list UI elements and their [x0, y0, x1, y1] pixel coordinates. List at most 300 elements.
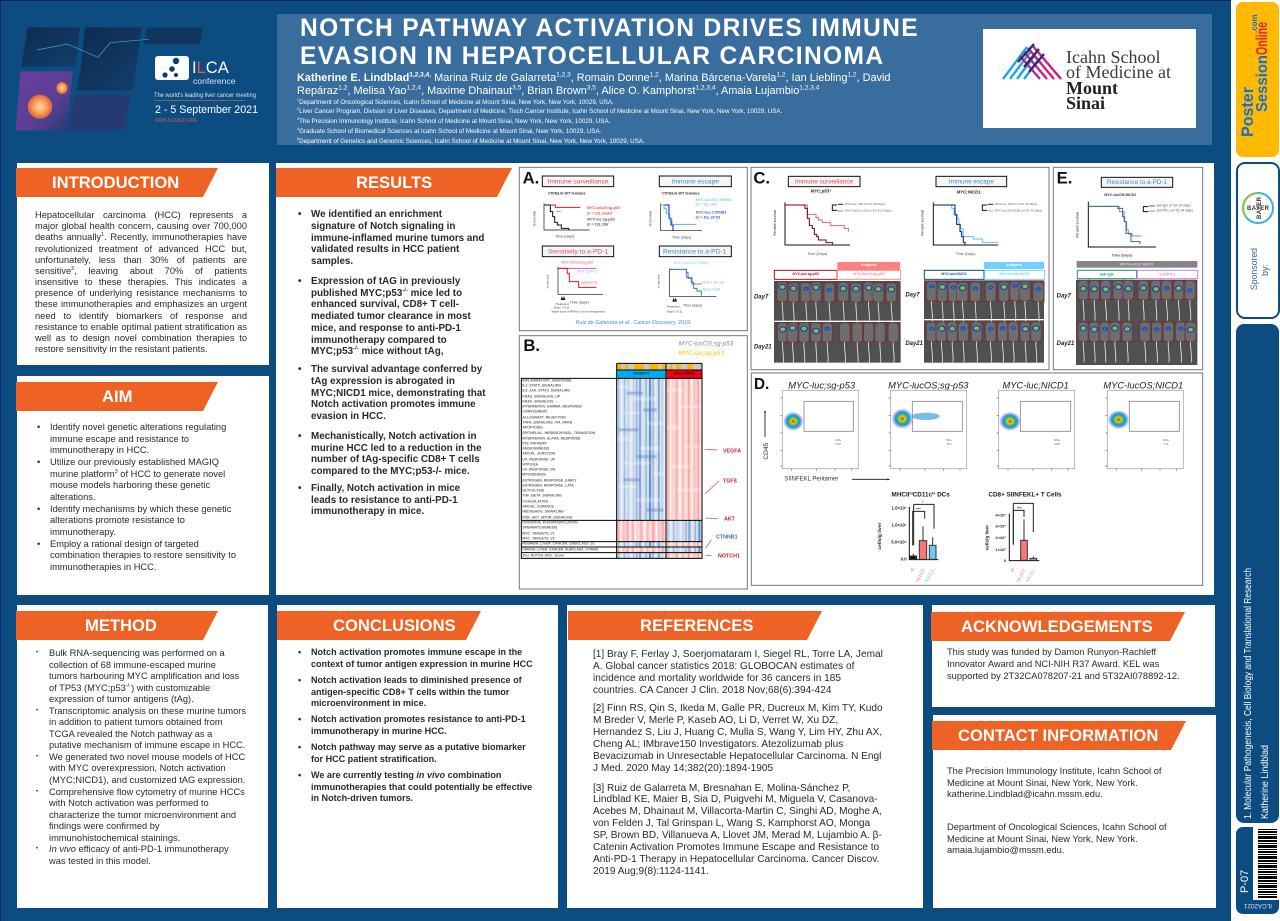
authors: Katherine E. Lindblad1,2,3,4, Marina Ruiz de Galarreta1,2,3, Romain Donne1,2, Marina Bárcena-Varela1,2, Ian Liebling1,2, David [297, 71, 891, 84]
flow plots: SIIN+ [835, 440, 842, 442]
panel C: survival and bioluminescence: Immune escape [949, 178, 994, 185]
panel C: survival and bioluminescence: MYC-luc; p53 (n=14; 48 days) [845, 202, 885, 206]
pathway labels: COMPLEMENT [522, 410, 548, 414]
antigen headers: MYC-lucOS;sg-p53 [853, 272, 885, 276]
list: aims: immunotherapy. [50, 527, 116, 537]
list: aims: immunotherapies in HCC. [50, 562, 156, 572]
panel E: resistance to anti-PD-1: Percent survival [1075, 212, 1079, 238]
heading: conclusions [277, 611, 481, 640]
affiliations: 5Department of Genetics and Genomic Sciences, Icahn School of Medicine at Mount Sinai, New York, New York, 10029, USA. [297, 137, 645, 145]
antigen headers: MYC-luc;NICD1 [941, 272, 967, 276]
list: results findings: Notch activation promotes immune [311, 399, 476, 410]
bar chart: DCs: 1.5×10⁷ [892, 506, 907, 511]
panel letter B: B. [523, 336, 540, 355]
day labels: Day21 [905, 341, 923, 347]
conference logo: ILCA 2021 [16, 27, 258, 131]
day labels [754, 293, 923, 351]
panel A: survival curves: Time (days) [570, 301, 589, 305]
panel: aim [17, 376, 269, 595]
curve: sensitivity [558, 267, 603, 294]
list: results findings: murine HCC led to a reduction in the [311, 442, 482, 454]
cluster headers: INFLAMED [674, 371, 695, 376]
bar chart: T cells: 0 [1004, 558, 1007, 563]
panel letter D: D. [754, 376, 769, 393]
legend: MYC-luc;sg-p53 [679, 350, 725, 357]
panel A: survival curves: (n = 11), 28d [696, 203, 717, 207]
list: conclusions points: microenvironment in mice. [311, 698, 426, 708]
bar chart: T cells: -/- [1009, 566, 1016, 573]
pathway labels: EPITHELIAL_MESENCHYMAL_TRANSITION [522, 431, 596, 435]
pathway labels: PI3K_AKT_MTOR_SIGNALING [522, 516, 573, 520]
tab: poster number and barcode: ILCA2021 [1244, 902, 1272, 909]
list: results findings: Expression of tAG in previously [311, 276, 460, 287]
list: results findings: validated results in HCC patient [311, 244, 459, 255]
legend: MYC-lucOS;sg-p53 [679, 341, 734, 348]
pathway labels: MYC_TARGETS_V1 [522, 531, 555, 535]
panel A: survival curves: MYC-lucOS;sg-p53 [587, 206, 620, 210]
authors: Repáraz1,2, Melisa Yao1,2,4, Maxime Dhainaut3,5, Brian Brown3,5, Alice O. Kamphorst1,2,3,4, Amaia Lujambio1,2,3,4 [297, 84, 819, 97]
list: method steps: in addition to patient tumors obtained from [49, 717, 223, 727]
list: method steps: putative mechanism of immune escape in HCC. [49, 740, 245, 750]
list: method steps: Comprehensive flow cytometry of murine HCCs [49, 787, 245, 797]
panel A: survival curves: C57BL/6 WT females [548, 191, 586, 195]
panel E: resistance to anti-PD-1: MYC-lucOS;NICD1 [1104, 193, 1136, 197]
bar chart: DCs: 5.0×10⁶ [891, 540, 907, 545]
ILCA logo mark and wording: The world's leading liver cancer meeting [154, 92, 257, 99]
heatmap cells [521, 363, 702, 558]
poster title: NOTCH PATHWAY ACTIVATION DRIVES IMMUNE [300, 15, 919, 42]
panel: contact information [933, 715, 1216, 908]
panel C: survival and bioluminescence: MYC-luc; NICD (n=15; 42 days) [995, 202, 1037, 206]
bar chart: T cells: sg-p53 [1015, 568, 1026, 583]
panel C: survival and bioluminescence: MYC;p53 [811, 189, 829, 194]
antigen headers: Antigens [1006, 263, 1022, 267]
day labels: Day7 [905, 293, 920, 299]
bar chart: DCs: NICD1 [924, 568, 935, 583]
list: results findings: MYC;NICD1 mice, demonstrating that [311, 388, 485, 398]
panel C: survival and bioluminescence: Immune surveillance [795, 178, 853, 185]
affiliations: 1Department of Oncological Sciences, Icahn School of Medicine at Mount Sinai, New York, New York, 10029, USA. [297, 97, 614, 106]
bar chart: DCs: hi [909, 491, 913, 495]
panel: references [567, 605, 923, 908]
pathway labels: TNFA_SIGNALING_VIA_NFKB [522, 421, 573, 425]
text: reference list: SP, Brown BD, Villanueva A, Llovet JM, Merad M, Lujambio A. β- [593, 830, 882, 841]
panel C: survival and bioluminescence: MYC;NICD1 [957, 189, 981, 194]
pathway labels [522, 378, 599, 557]
list: results findings: signature of Notch signaling in [311, 221, 455, 232]
list: conclusions points: Notch activation leads to diminished presence of [311, 675, 522, 685]
panel: conclusions [277, 605, 558, 908]
list: aims: Identify mechanisms by which these genetic [50, 504, 231, 514]
pathway labels: SPERMATOGENESIS [522, 526, 558, 530]
curve: escape [661, 203, 702, 231]
tab: sponsor Bayer [1237, 163, 1279, 318]
day labels: Day21 [754, 345, 772, 351]
list: method steps [36, 648, 246, 866]
curve: surveillance [544, 203, 590, 230]
ILCA logo mark and wording: ILCA [192, 59, 229, 77]
bar chart: DCs: 0.0 [901, 557, 907, 562]
pathway labels: INTERFERON_GAMMA_RESPONSE [522, 405, 582, 409]
panel A: survival curves: % survival [546, 274, 550, 288]
panel C: survival and bioluminescence: MYC-lucOS;NICD1 (n=15; 42 days) [995, 209, 1042, 213]
list: aims: alterations promote resistance to [50, 515, 185, 525]
heading: results: RESULTS [356, 173, 432, 192]
text: reference list: Hernandez S, Liu J, Huang C, Mulla S, Wang Y, Lim HY, Zhu AX, [593, 727, 882, 738]
pathway labels: TGF_BETA_SIGNALING [522, 494, 562, 498]
flow titles: MYC-luc;sg-p53 [788, 381, 856, 391]
list: method steps: with MYC overexpression, Notch activation [49, 763, 226, 773]
affiliations [297, 97, 782, 145]
list: conclusions points: antigen-specific CD8+ T cells within the tumor [311, 686, 509, 696]
panel C: survival and bioluminescence: Percent survival [773, 210, 777, 236]
list: aims: immunotherapy in HCC. [50, 445, 149, 455]
text: reference list: Catenin Activation Promotes Immune Escape and Resistance to [593, 842, 879, 853]
flow plots: 3.16 [1164, 444, 1169, 446]
list: results findings: number of tAg-specific CD8+ T cells [311, 454, 480, 465]
tab: topic and presenter [1236, 324, 1279, 823]
ILCA logo mark and wording: WWW.ILCA2021.ORG [155, 118, 197, 124]
pathway labels: UV_RESPONSE_UP [522, 457, 556, 461]
tab: poster session online: Poster [1238, 87, 1257, 137]
panel A: survival curves: % survival [532, 211, 536, 226]
text: reference list: Acebes M, Dhainaut M, Villacorta-Martin C, Singhi AD, Moghe A, [593, 806, 882, 817]
heading: contact information: CONTACT INFORMATION [958, 726, 1158, 745]
icon: Bayer cross logo: BAYER [1247, 206, 1270, 212]
pathway labels: KRAS_SIGNALING [522, 400, 554, 404]
text: reference list [593, 649, 883, 877]
flow plots: 26.3 [947, 444, 952, 446]
list: aims: combination therapies to restore sensitivity to [50, 550, 236, 560]
bar chart: DCs: *** [916, 507, 921, 512]
heading: references [568, 611, 822, 640]
heading: results [276, 168, 512, 197]
list: results findings: Finally, Notch activation in mice [311, 483, 460, 494]
affiliations: 4Graduate School of Biomedical Sciences at Icahn School of Medicine at Mount Sinai, New York, 10029, USA. [297, 127, 601, 135]
text: funding [947, 647, 1180, 681]
citation: Ruiz de Galarreta et al., Cancer Discovery, 2019. [576, 320, 691, 326]
mouse images left [774, 281, 901, 363]
list: aims: Utilize our previously established MAGIQ [50, 457, 219, 467]
panel A: survival curves: % survival [648, 211, 652, 226]
text: reference list: 2019 Aug;9(8):1124-1141. [593, 866, 709, 877]
institution logo: Icahn School of Medicine at Mount Sinai: Sinai [1066, 93, 1105, 113]
list: conclusions points: immunotherapies that could potentially be effective [311, 782, 532, 792]
antigen headers: Antigens [861, 263, 876, 267]
text: reference list: Bevacizumab in Unresectable Hepatocellular Carcinoma. N Engl [593, 751, 881, 762]
tab: topic and presenter: Katherine Lindblad [1260, 745, 1271, 819]
panel B: heatmap [519, 336, 747, 589]
list: conclusions points: in Notch-driven tumors. [311, 793, 413, 803]
pathway labels: P53_PATHWAY [522, 442, 548, 446]
list: results findings: samples. [311, 256, 353, 267]
treatment group headers: MYCluc/OS; NICD1 [1120, 263, 1153, 267]
list: results findings: The survival advantage conferred by [311, 364, 482, 375]
authors [297, 71, 891, 97]
text: reference list: [3] Ruiz de Galarreta M, Bresnahan E, Molina-Sánchez P, [593, 783, 850, 794]
pathway labels: INTERFERON_ALPHA_RESPONSE [522, 437, 581, 441]
list: results findings: mediated tumor clearance in most [311, 311, 471, 322]
heading: references: REFERENCES [640, 616, 753, 635]
text: reference list: Anti-PD-1 Therapy in Hepatocellular Carcinoma. Cancer Discov. [593, 854, 879, 865]
pathway labels: KRAS_SIGNALING_UP [522, 395, 561, 399]
pathway labels: ESTROGEN_RESPONSE_EARLY [522, 479, 577, 483]
panel letter C: C. [753, 168, 770, 187]
flow titles: MYC-lucOS;sg-p53 [888, 381, 969, 391]
list: results findings: enhanced survival, CD8+ T cell- [311, 299, 459, 310]
bar chart: DCs: cells/g liver [877, 522, 883, 550]
text: contact details: The Precision Immunology Institute, Icahn School of [947, 766, 1161, 776]
heading: introduction: INTRODUCTION [52, 173, 179, 192]
flow axes: SIINFEKL Pentamer [784, 477, 838, 483]
list: conclusions points: Notch activation promotes immune escape in the [311, 647, 522, 657]
box label [1101, 177, 1173, 187]
tab: topic and presenter: 1. Molecular Pathogenesis, Cell Biology and Translational Research [1243, 568, 1254, 819]
panel E: resistance to anti-PD-1: Time (Days) [1112, 254, 1133, 258]
panel A: survival curves: % survival [657, 274, 661, 288]
treatment group headers [1077, 261, 1198, 279]
list: method steps: collection of 68 immune-escaped murine [49, 660, 216, 670]
list: aims: Employ a rational design of targeted [50, 539, 199, 549]
list: method steps: TCGA revealed the Notch pathway as a [49, 729, 212, 739]
list: method steps: In vivo efficacy of anti-PD-1 immunotherapy [49, 844, 229, 854]
list: results findings: evasion in HCC. [311, 411, 386, 422]
antigen headers: MYC-luc;sg-p53 [792, 272, 819, 276]
mouse images [1076, 280, 1197, 365]
treatment group headers: anti-PD-1 [1159, 272, 1175, 276]
list: method steps: Transcriptomic analysis on these murine tumors [49, 706, 246, 716]
panel A: survival curves: Treatment [555, 302, 569, 306]
list: aims: mouse models harboring these genetic [50, 480, 210, 490]
panel C: survival and bioluminescence: Percent survival [920, 210, 924, 236]
flow titles [788, 381, 1183, 391]
pathway labels: Zhu_NOTCH_HCC_Score [522, 553, 564, 557]
list: results findings: tAg expression is abrogated in [311, 376, 455, 387]
gene callouts: TGFß [723, 479, 738, 485]
day labels [1057, 293, 1074, 347]
panel: introduction [17, 163, 269, 365]
list: results findings: mice, and response to anti-PD-1 [311, 323, 461, 334]
tab: poster session online [1236, 2, 1279, 157]
panel letter E: E. [1057, 168, 1072, 187]
sidebar tabs [1236, 2, 1280, 914]
list: method steps: Bulk RNA-sequencing was performed on a [49, 648, 225, 658]
flow axes: CD45 [763, 442, 770, 460]
list: conclusions points: Notch pathway may serve as a putative biomarker [311, 742, 526, 752]
heading: acknowledgements: ACKNOWLEDGEMENTS [961, 617, 1153, 636]
gene callouts: NOTCH1 [718, 553, 740, 559]
pathway labels: MYOGENESIS [522, 473, 546, 477]
panel A: survival curves: Sensitivity to a-PD-1 [548, 248, 608, 255]
pathway labels: OXIDATIVE_PHOSPHORYLATION [522, 521, 578, 525]
panel C: survival and bioluminescence: -/- [829, 188, 832, 192]
panel: acknowledgements [932, 605, 1215, 707]
poster title [300, 15, 919, 70]
pathway labels: COAGULATION [522, 499, 548, 503]
panel A: survival curves: MYC-lucOS;sg-p53 [561, 261, 593, 265]
curve: resistance [670, 268, 716, 297]
flow titles: MYC-lucOS;NICD1 [1103, 381, 1183, 391]
gene callouts: AKT [724, 516, 736, 522]
list: method steps: of TP53 (MYC;p53-/-) with customizable [49, 683, 210, 693]
panel A: survival curves: Time (days) [672, 235, 691, 239]
list: results findings: compared to the MYC;p53-/- mice. [311, 466, 470, 477]
tab: poster session online: Session [1254, 55, 1271, 112]
bar chart: DCs: -/- [909, 566, 916, 573]
list: method steps: We generated two novel mouse models of HCC [49, 752, 245, 762]
institution logo: Icahn School of Medicine at Mount Sinai [983, 29, 1196, 128]
tab: sponsor Bayer: by: [1260, 264, 1270, 276]
panel A: survival curves: Time (days) [683, 304, 702, 308]
ILCA logo mark and wording: 2 - 5 September 2021 [155, 104, 258, 116]
text: reference list: A. Global cancer statistics 2018: GLOBOCAN estimates of [593, 661, 854, 672]
text: contact details: Medicine at Mount Sinai, New York, New York. [947, 778, 1138, 788]
panel A: survival curves: IgG (n=14) [702, 287, 720, 291]
ILCA logo mark and wording [154, 56, 258, 124]
bar chart: T cells: CD8+ SIINFEKL+ T Cells [988, 491, 1062, 498]
pathway labels: APICAL_SURFACE [522, 505, 555, 509]
tab: poster number and barcode: P-07 [1239, 870, 1251, 893]
text: funding: This study was funded by Damon Runyon-Rachleff [947, 647, 1156, 657]
list: results findings: We identified an enrichment [311, 209, 442, 220]
pathway labels: APOPTOSIS [522, 426, 543, 430]
pathway labels: MYC_TARGETS_V2 [522, 536, 555, 540]
list: method steps: findings were confirmed by [49, 821, 160, 831]
text: reference list: von Felden J, Tal Grinspan L, Wang S, Kamphorst AO, Monga [593, 818, 870, 829]
pathway labels: HEDGEHOG_SIGNALING [522, 510, 564, 514]
flow plots: SIIN+ [1163, 440, 1170, 442]
text: reference list: M Breder V, Merle P, Kaseb AO, Li D, Verret W, Xu DZ, [593, 715, 838, 726]
text: introduction body: Hepatocellular carcinoma (HCC) represents a major global health concern, causing over 700,000 deaths annually1. Recently, immunotherapies have revolutionized treatment of advanced HCC but, unfortunately, less than 30% of patients are sensitive2, leaving about 70% of patients insensitive to these therapies. This indicates a presence of underlying resistance mechanisms to these immunotherapies and emphasizes an urgent need to identify biomarkers of response and resistance to enable optimal patient stratification as well as to design novel combination therapies to restore sensitivity in the resistant patients. [35, 210, 247, 354]
panel A: survival curves: Immune surveillance [547, 178, 609, 185]
panel A: survival curves: C57BL/6 WT females [662, 191, 700, 195]
bar chart: DCs: MHCII [892, 491, 909, 498]
box labels [788, 176, 1007, 187]
panel: method [17, 605, 268, 908]
survival curve [1088, 202, 1156, 247]
day labels: Day7 [1057, 293, 1072, 299]
poster title: EVASION IN HEPATOCELLULAR CARCINOMA [300, 43, 884, 70]
tab: poster session online: Online [1254, 22, 1271, 55]
flow plots: SIIN+ [946, 440, 953, 442]
flow plots [780, 390, 1183, 471]
tab: sponsor Bayer: Sponsored [1249, 248, 1259, 290]
panel A: survival curves [519, 167, 747, 331]
heading: aim: AIM [102, 387, 132, 406]
treatment group headers: anti-IgG [1100, 272, 1114, 276]
panel A: survival curves: MYC-lucOS;CTNNB1 [674, 261, 709, 265]
text: funding: supported by 2T32CA078207-21 and 5T32AI078892-12. [947, 671, 1180, 681]
list: conclusions points: immunotherapy in murine HCC. [311, 726, 447, 736]
panel A: survival curves: Days 7,9,11 [554, 305, 570, 309]
panel A: survival curves: MYC-lucOS;CTNNB1 [696, 198, 732, 202]
pathway labels: HOSHIDA_LIVER_CANCER_SUBCLASS_S1 [522, 542, 595, 546]
text: contact details: katherine.Lindblad@icahn.mssm.edu. [947, 789, 1103, 799]
day labels: Day7 [754, 294, 769, 300]
text: reference list: [2] Finn RS, Qin S, Ikeda M, Galle PR, Ducreux M, Kim TY, Kudo [593, 703, 883, 714]
bar chart: T cells: *** [1017, 506, 1022, 511]
text: contact details: Medicine at Mount Sinai, New York, New York. [947, 834, 1138, 844]
panel C: survival and bioluminescence: Time (Days) [807, 252, 827, 256]
bar chart: DCs: DCs [935, 491, 950, 498]
panel D: flow cytometry and bar charts [751, 373, 1203, 585]
sample annotation bar [617, 363, 702, 370]
list: method steps: characterize the tumor microenvironment and [49, 810, 236, 820]
text: reference list: incidence and mortality worldwide for 36 cancers in 185 [593, 673, 841, 684]
panel C: survival and bioluminescence: MYC-lucOS; p53 (n=14; 81.5 days) [845, 209, 892, 213]
ILCA logo mark and wording: conference [193, 76, 236, 86]
heading: contact information [932, 721, 1186, 750]
panel A: survival curves: Time (days) [555, 235, 575, 239]
antigen headers [774, 262, 1045, 279]
list: conclusions points: context of tumor antigen expression in murine HCC [311, 659, 533, 669]
text: reference list: Cheng AL; IMbrave150 Investigators. Atezolizumab plus [593, 739, 843, 750]
list: method steps: was tested in this model. [49, 856, 151, 866]
pathway labels: IL6_JAK_STAT3_SIGNALING [522, 389, 570, 393]
list: results findings: immunotherapy compared to [311, 334, 447, 346]
gene callouts: VEGFA [723, 448, 741, 454]
panel C: survival and bioluminescence: Time (Days) [956, 252, 975, 256]
flow axes [763, 410, 890, 483]
list: aims: immune escape and resistance to [50, 434, 189, 444]
heading: acknowledgements [931, 612, 1185, 641]
panel A: survival curves: aPD-1 (n=7) [577, 269, 597, 273]
pathway labels: ESTROGEN_RESPONSE_LATE [522, 484, 575, 488]
box labels [542, 176, 731, 257]
list: aims: alterations. [50, 492, 95, 502]
heading: method: METHOD [85, 616, 157, 635]
text: reference list: Lindblad KE, Maier B, Sia D, Puigvehi M, Miguela V, Casanova- [593, 794, 878, 805]
institution logo: Icahn School of Medicine at Mount Sinai: Mount [1066, 78, 1118, 98]
heading: conclusions: CONCLUSIONS [333, 616, 456, 635]
panel A: survival curves: Treatment [666, 304, 680, 308]
text: funding: Innovator Award and NCI-NIH R37 Award. KEL was [947, 659, 1159, 669]
box label: Resistance to a-PD-1 [1107, 179, 1168, 186]
bar chart: T cells: 4×10⁷ [995, 512, 1006, 517]
bar chart: T cells: 2×10⁷ [995, 535, 1006, 540]
bar chart: T cells [985, 491, 1062, 583]
panel: results text [276, 163, 1214, 595]
title banner [277, 14, 1212, 145]
pathway labels: GLYCOLYSIS [522, 489, 545, 493]
text: contact details: Department of Oncological Sciences, Icahn School of [947, 822, 1167, 832]
list: method steps: expression of tumor antigens (tAg). [49, 694, 194, 704]
bar chart: T cells: 1×10⁷ [995, 547, 1006, 552]
list: aims: Identify novel genetic alterations regulating [50, 422, 226, 432]
curves left [785, 202, 850, 245]
flow plots: SIIN+ [1054, 440, 1061, 442]
panel letter A: A. [523, 168, 539, 187]
pathway labels: APICAL_JUNCTION [522, 452, 556, 456]
panel A: survival curves: **** [556, 210, 562, 214]
bar chart: DCs [877, 491, 950, 583]
text: reference list: [1] Bray F, Ferlay J, Soerjomataram I, Siegel RL, Torre LA, Jemal [593, 649, 883, 660]
text: reference list: countries. CA Cancer J Clin. 2018 Nov;68(6):394-424 [593, 685, 831, 696]
panel E: resistance to anti-PD-1: anti-IgG (n=15; 34 days) [1157, 204, 1191, 208]
list: conclusions points [298, 647, 533, 803]
list: conclusions points: Notch activation promotes resistance to anti-PD-1 [311, 714, 526, 724]
list: conclusions points: We are currently testing in vivo combination [311, 770, 501, 780]
heading: aim [16, 382, 218, 411]
heading: introduction [16, 168, 218, 197]
tab: poster number and barcode [1236, 827, 1279, 914]
institution logo: Icahn School of Medicine at Mount Sinai: of Medicine at [1066, 62, 1171, 82]
flow plots: 0.047 [835, 444, 842, 446]
flow titles: MYC-luc;NICD1 [1002, 381, 1069, 391]
panel A: survival curves: (n = 13), undef [587, 211, 613, 215]
bar chart: DCs: hi [932, 491, 935, 495]
icon: Bayer cross logo: BAYER [1257, 196, 1263, 219]
